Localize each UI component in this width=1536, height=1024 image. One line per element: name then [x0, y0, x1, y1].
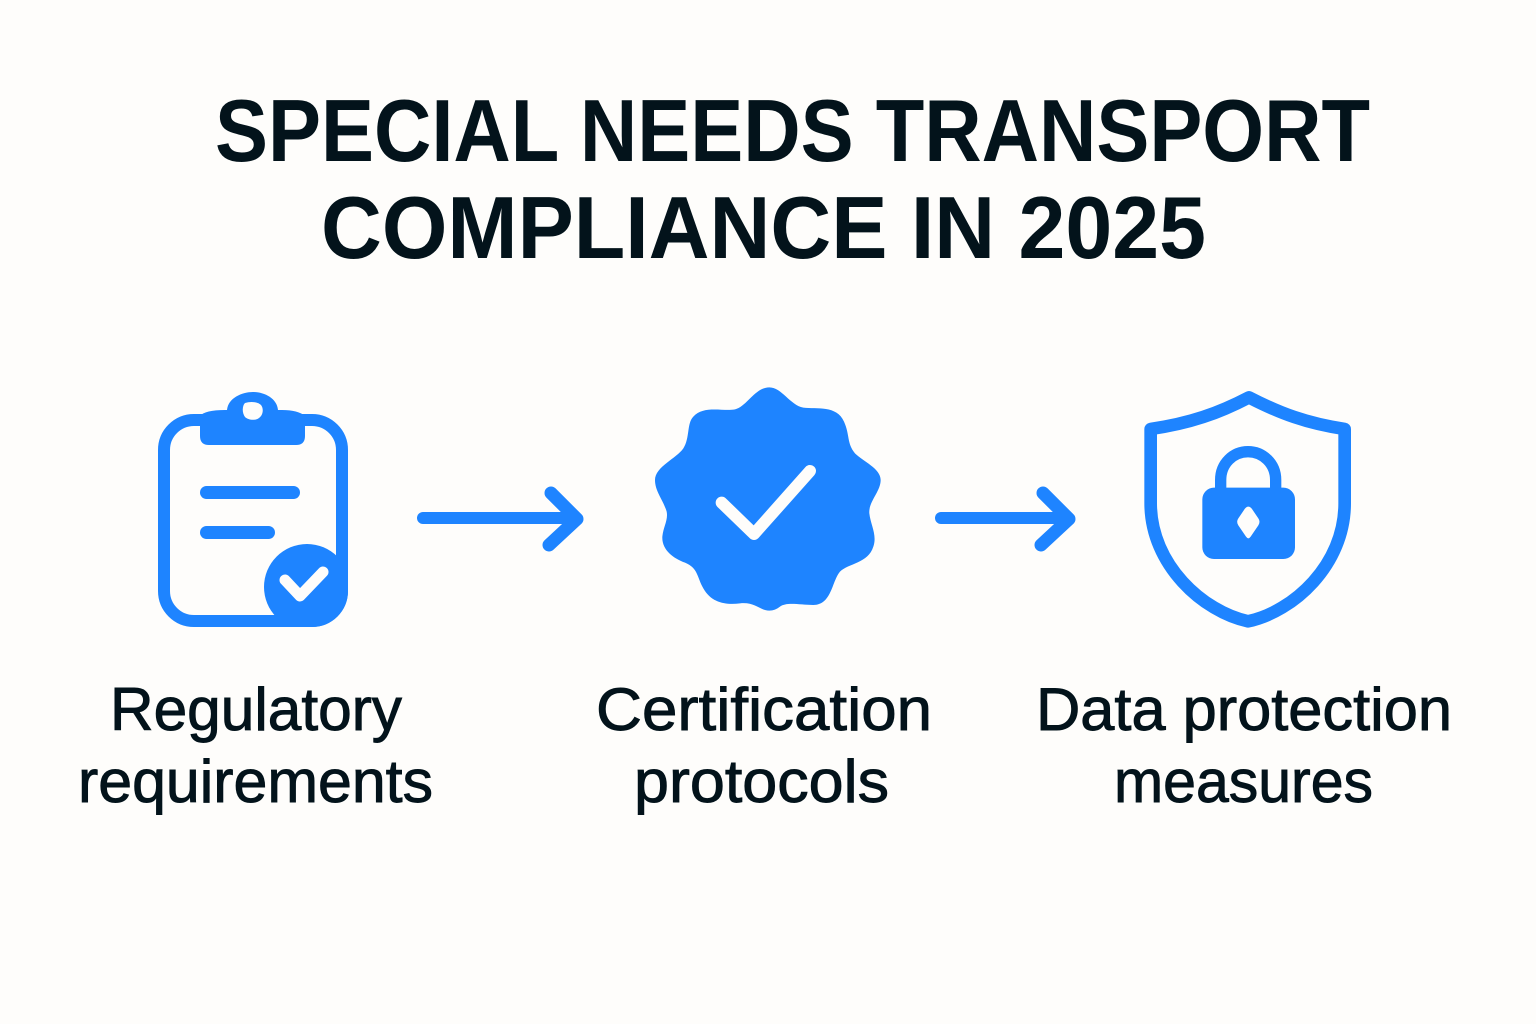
icon: clipboard	[164, 392, 350, 630]
title	[215, 81, 1370, 277]
label: data protection measures: measures	[1114, 748, 1373, 815]
label: regulatory requirements: requirements	[78, 748, 433, 815]
icon: certification badge	[655, 387, 881, 611]
arrow: regulatory to certification	[423, 493, 577, 545]
label: certification protocols: protocols	[634, 748, 889, 815]
label: regulatory requirements: Regulatory	[110, 676, 402, 743]
label: data protection measures: Data protection	[1036, 676, 1452, 743]
label: regulatory requirements	[78, 676, 433, 815]
label: certification protocols	[596, 676, 932, 815]
arrow: certification to data protection	[941, 493, 1069, 545]
label: data protection measures	[1036, 676, 1452, 815]
title: SPECIAL NEEDS TRANSPORT	[215, 81, 1370, 180]
label: certification protocols: Certification	[596, 676, 932, 743]
icon: shield with padlock	[1151, 397, 1345, 621]
title: COMPLIANCE IN 2025	[321, 178, 1206, 277]
